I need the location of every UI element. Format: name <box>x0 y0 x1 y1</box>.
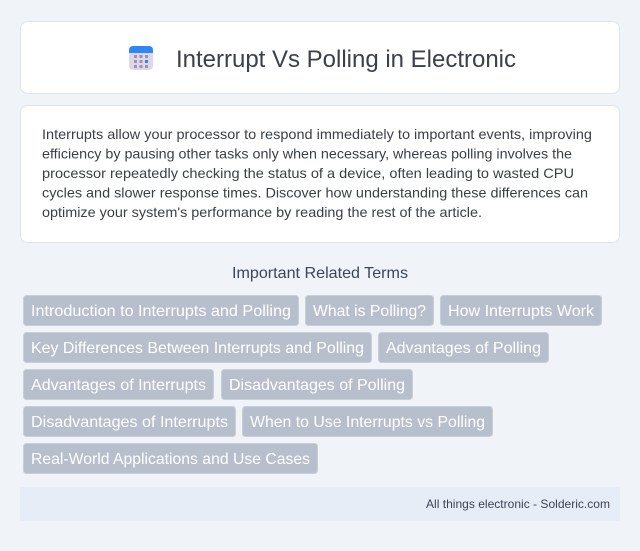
panel: intro text: cycles and slower response times. Discover how understanding these differences can <box>42 184 588 200</box>
tag: when to use: When to Use Interrupts vs Polling <box>250 414 485 431</box>
tag: key differences: Key Differences Between Interrupts and Polling <box>31 340 364 357</box>
tag: real-world applications: Real-World Applications and Use Cases <box>31 451 310 468</box>
panel: intro text: efficiency by pausing other tasks only when necessary, whereas polling involves the <box>42 146 572 162</box>
tag: key differences <box>24 332 372 362</box>
panel: intro text <box>20 106 620 242</box>
tag: introduction <box>24 296 298 326</box>
tag cloud <box>24 296 602 474</box>
title: Interrupt Vs Polling in Electronic <box>176 46 516 73</box>
footer: All things electronic - Solderic.com <box>426 497 610 511</box>
tag: advantages of interrupts <box>24 370 214 400</box>
panel: intro text: Interrupts allow your processor to respond immediately to important events, improving <box>42 126 592 142</box>
heading: related terms: Important Related Terms <box>232 265 408 282</box>
tag: how interrupts work: How Interrupts Work <box>448 303 595 320</box>
header panel <box>20 22 620 94</box>
tag: advantages of interrupts: Advantages of Interrupts <box>31 377 206 394</box>
tag: when to use <box>242 406 492 436</box>
tag: introduction: Introduction to Interrupts and Polling <box>31 303 291 320</box>
panel: intro text: processor repeatedly checking the status of a device, often leading to wasted CPU <box>42 165 574 181</box>
icon: calendar <box>129 46 153 70</box>
footer <box>20 487 620 521</box>
tag: what is polling: What is Polling? <box>313 303 426 320</box>
tag: advantages of polling <box>378 332 548 362</box>
tag: advantages of polling: Advantages of Polling <box>386 340 541 357</box>
tag: how interrupts work <box>440 296 602 326</box>
tag: disadvantages of interrupts: Disadvantages of Interrupts <box>31 414 228 431</box>
tag: disadvantages of interrupts <box>24 406 236 436</box>
tag: disadvantages of polling: Disadvantages of Polling <box>229 377 405 394</box>
tag: real-world applications <box>24 444 318 474</box>
tag: disadvantages of polling <box>222 370 412 400</box>
tag: what is polling <box>306 296 434 326</box>
panel: intro text: optimize your system's performance by reading the rest of the article. <box>42 204 482 220</box>
